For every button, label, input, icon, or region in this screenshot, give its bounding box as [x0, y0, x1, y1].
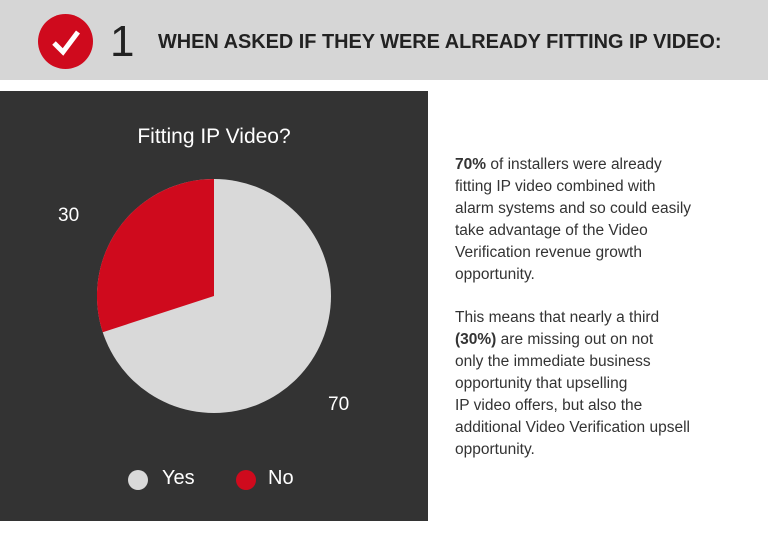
text block: 70% of installers were already	[455, 156, 662, 173]
panel: pie chart	[0, 91, 428, 521]
text block: only the immediate business	[455, 353, 651, 370]
pie chart	[96, 179, 331, 413]
text block: (30%) are missing out on not	[455, 331, 653, 348]
label 30: 30	[58, 205, 79, 226]
text block	[455, 156, 691, 458]
text block: This means that nearly a third	[455, 309, 659, 326]
text block: IP video offers, but also the	[455, 397, 642, 414]
icon: red check circle	[38, 14, 93, 69]
header band	[0, 0, 768, 80]
text block: additional Video Verification upsell	[455, 419, 690, 436]
text block: Verification revenue growth	[455, 244, 642, 261]
text block: fitting IP video combined with	[455, 178, 655, 195]
number: 1	[110, 17, 134, 66]
text block: opportunity.	[455, 266, 535, 283]
text block: take advantage of the Video	[455, 222, 648, 239]
label 70: 70	[328, 394, 349, 415]
text block: alarm systems and so could easily	[455, 200, 691, 217]
legend: No	[268, 467, 294, 489]
legend: Yes	[162, 467, 195, 489]
text block: opportunity that upselling	[455, 375, 627, 392]
text block: opportunity.	[455, 441, 535, 458]
chart title: Fitting IP Video?	[137, 125, 291, 148]
title: WHEN ASKED IF THEY WERE ALREADY FITTING IP VIDEO:	[158, 31, 722, 53]
legend	[128, 467, 294, 490]
